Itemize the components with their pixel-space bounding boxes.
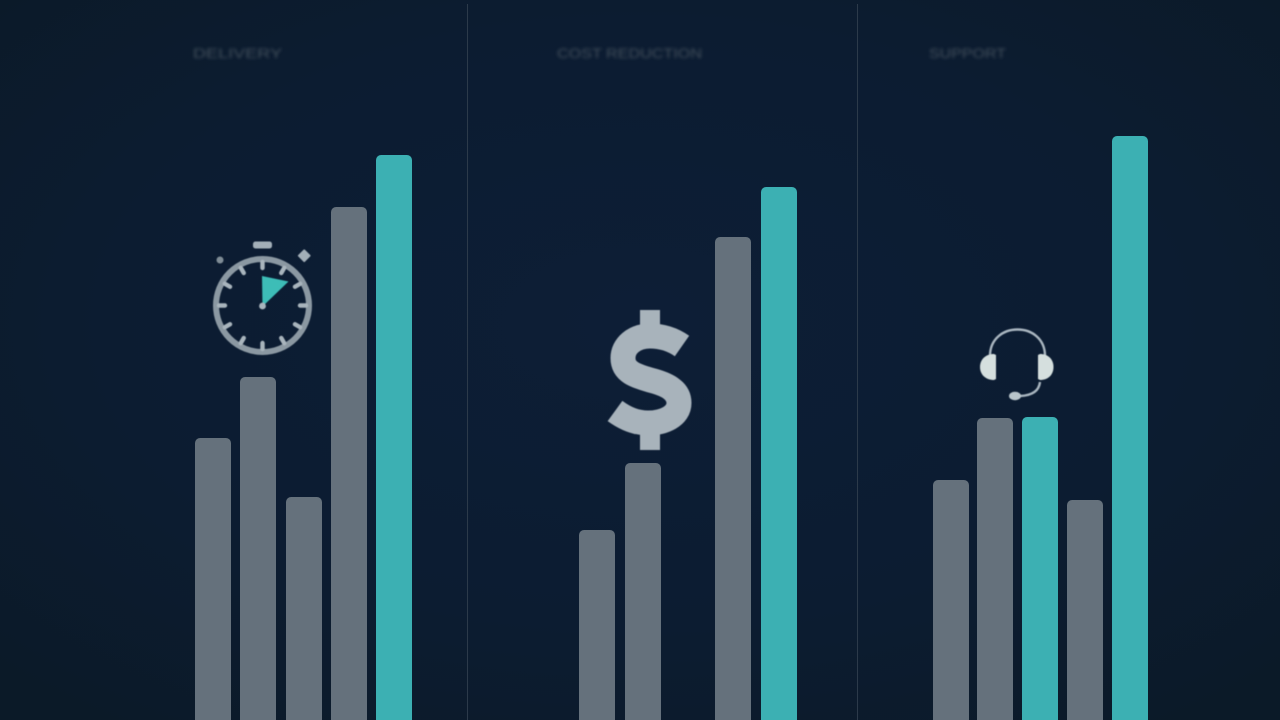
panel: right, headset and bars — [929, 45, 1148, 720]
panel: middle, dollar and bars — [557, 45, 797, 720]
icon: headset — [980, 330, 1054, 400]
heading: left panel: DELIVERY — [193, 45, 283, 61]
icon: stopwatch — [216, 242, 311, 352]
heading: right panel: SUPPORT — [929, 45, 1006, 61]
icon: dollar sign — [615, 310, 682, 450]
panel: left, stopwatch and bars — [193, 45, 412, 720]
bar chart: middle panel — [579, 187, 797, 720]
bar chart: left panel — [195, 155, 412, 720]
bar chart: right panel — [933, 136, 1148, 720]
heading: middle panel: COST REDUCTION — [557, 45, 702, 61]
